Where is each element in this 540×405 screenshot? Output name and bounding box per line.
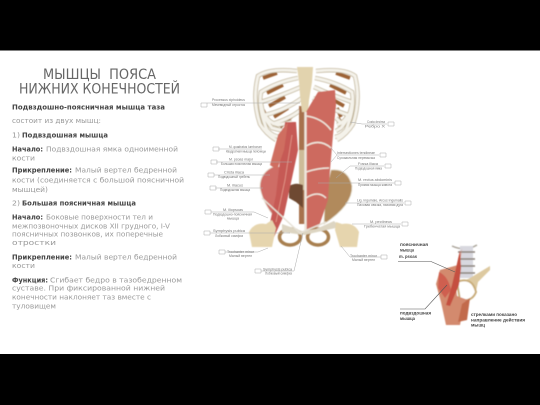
inset labels: подвздошная: [400, 310, 432, 316]
text block: muscle description: кости: [12, 262, 35, 270]
inset drawing: [436, 245, 490, 325]
leader lines and labels: M. quadratus lumborum: [229, 145, 262, 149]
text block: muscle description: Боковые поверхности тел и: [46, 214, 153, 222]
leader lines and labels: Лобковый симфиз: [215, 234, 243, 238]
leader lines and labels: Прямая мышца живота: [358, 183, 392, 187]
femur: left: [249, 220, 276, 247]
rib cage: [255, 70, 358, 140]
leader lines and labels: Symphysis pubica: [213, 229, 245, 233]
text block: muscle description: Прикрепление:: [12, 166, 72, 174]
text block: muscle description: суставе. При фиксированной нижней: [12, 284, 165, 292]
text block: muscle description: Большая поясничная мышца: [22, 200, 136, 208]
title: [19, 67, 180, 98]
sternum: [297, 67, 313, 112]
text block: muscle description: Начало:: [12, 214, 43, 222]
text block: muscle description: Функция:: [12, 276, 48, 284]
text block: muscle description: отростки: [12, 239, 56, 247]
pubic bar: [282, 221, 340, 235]
inset labels: поясничная: [400, 242, 429, 247]
leader lines and labels: M. pectineus: [370, 220, 392, 224]
leader lines and labels: Processus xiphoideus: [212, 98, 245, 102]
text block: muscle description: Начало:: [12, 146, 43, 154]
inset labels: [399, 242, 526, 328]
leader lines and labels: Малый вертел: [352, 258, 375, 262]
text block: muscle description: состоит из двух мышц:: [12, 117, 101, 125]
leader lines and labels: Trochanter minor: [227, 250, 255, 254]
femur: right: [335, 222, 359, 247]
inset labels: стрелками показано: [471, 312, 517, 317]
text block: muscle description: кости: [12, 154, 35, 162]
text block: muscle description: Подвздошная ямка одноименной: [46, 146, 178, 154]
text block: muscle description: Малый вертел бедренной: [75, 166, 177, 174]
inset labels: m. psoas: [399, 254, 418, 259]
leader lines and labels: Мечевидный отросток: [212, 103, 245, 107]
slide background: [0, 50, 540, 354]
text block: muscle description: туловищем: [12, 302, 56, 310]
leader lines and labels: Подвздошная мышца: [220, 188, 250, 192]
inguinal ligament: [262, 198, 326, 233]
leader lines and labels: Гребенчатая мышца: [364, 224, 400, 228]
text block: muscle description: Малый вертел бедренной: [75, 253, 177, 261]
pelvis: right iliac wing: [324, 170, 352, 224]
leader lines and labels: Малый вертел: [229, 254, 252, 258]
text block: muscle description: Подвздошно-поясничная мышца таза: [12, 103, 165, 111]
leader lines and labels: Ребро X: [365, 124, 386, 128]
inset labels: мышца: [400, 248, 415, 252]
leader lines and labels: M. rectus abdominis: [358, 178, 392, 182]
leader lines and labels: [201, 98, 411, 276]
pubic rings: [280, 229, 328, 245]
leader lines and labels: Сухожильная перемычка: [337, 156, 375, 160]
pelvis: central cavity: [289, 184, 303, 208]
leader lines and labels: M. psoas major: [229, 158, 254, 162]
leader lines and labels: Trochanter minor: [350, 254, 378, 258]
text block: muscle description: конечности наклоняет таз вместе с: [12, 293, 151, 301]
title: НИЖНИХ КОНЕЧНОСТЕЙ: [19, 80, 180, 98]
text block: muscle description: 1): [12, 132, 20, 140]
leader lines and labels: M. iliopsoas: [223, 208, 243, 212]
text block: muscle description: кости (соединяется с большой поясничной: [12, 176, 184, 184]
text block: muscle description: поясничных позвонков, их поперечные: [12, 231, 163, 239]
title: МЫШЦЫ ПОЯСА: [43, 67, 156, 83]
text block: muscle description: мышцей): [12, 186, 48, 194]
inset labels: мышца: [400, 316, 416, 321]
text block: muscle description: Подвздошная мышца: [22, 132, 108, 140]
leader lines and labels: Crista iliaca: [224, 170, 244, 174]
inset labels: направление действия: [471, 318, 526, 322]
text block: muscle description: [12, 103, 184, 310]
muscle: iliacus: [260, 166, 287, 228]
leader lines and labels: Подвздошная ямка: [355, 166, 382, 170]
leader lines and labels: Большая поясничная мышца: [221, 162, 262, 166]
text block: muscle description: Прикрепление:: [12, 253, 72, 261]
anatomical illustration: torso muscles and pelvis: [249, 67, 359, 247]
leader lines and labels: Fossa iliaca: [358, 162, 378, 166]
leader lines and labels: Intersectiones tendineae: [337, 151, 375, 155]
leader lines and labels: Lig. inguinale, Arcus inguinalis: [357, 198, 403, 202]
text block: muscle description: Сгибает бедро в тазобедренном: [50, 276, 182, 284]
text block: muscle description: межпозвоночных дисков XII грудного, I-V: [12, 222, 170, 230]
muscle: psoas major and quadratus lumborum: [268, 122, 298, 246]
leader lines and labels: Symphysis pubica: [263, 268, 292, 272]
inset labels: мышц: [471, 322, 485, 328]
inset: iliopsoas side illustration: [398, 242, 526, 328]
leader lines and labels: Лобковый симфиз: [265, 272, 292, 276]
leader lines and labels: Подвздошный гребень: [218, 175, 250, 179]
leader lines and labels: Квадратная мышца поясницы: [226, 150, 266, 154]
spine: [299, 106, 305, 224]
muscle: rectus abdominis: [306, 90, 336, 233]
leader lines and labels: Подвздошно-поясничная: [213, 212, 252, 216]
inset leader lines: [398, 262, 455, 309]
text block: muscle description: 2): [12, 200, 20, 208]
leader lines and labels: мышца: [227, 216, 239, 220]
leader lines and labels: Паховая связка, паховая дуга: [357, 203, 403, 207]
leader lines and labels: M. iliacus: [227, 184, 243, 188]
leader lines and labels: Costa decima: [367, 120, 385, 124]
